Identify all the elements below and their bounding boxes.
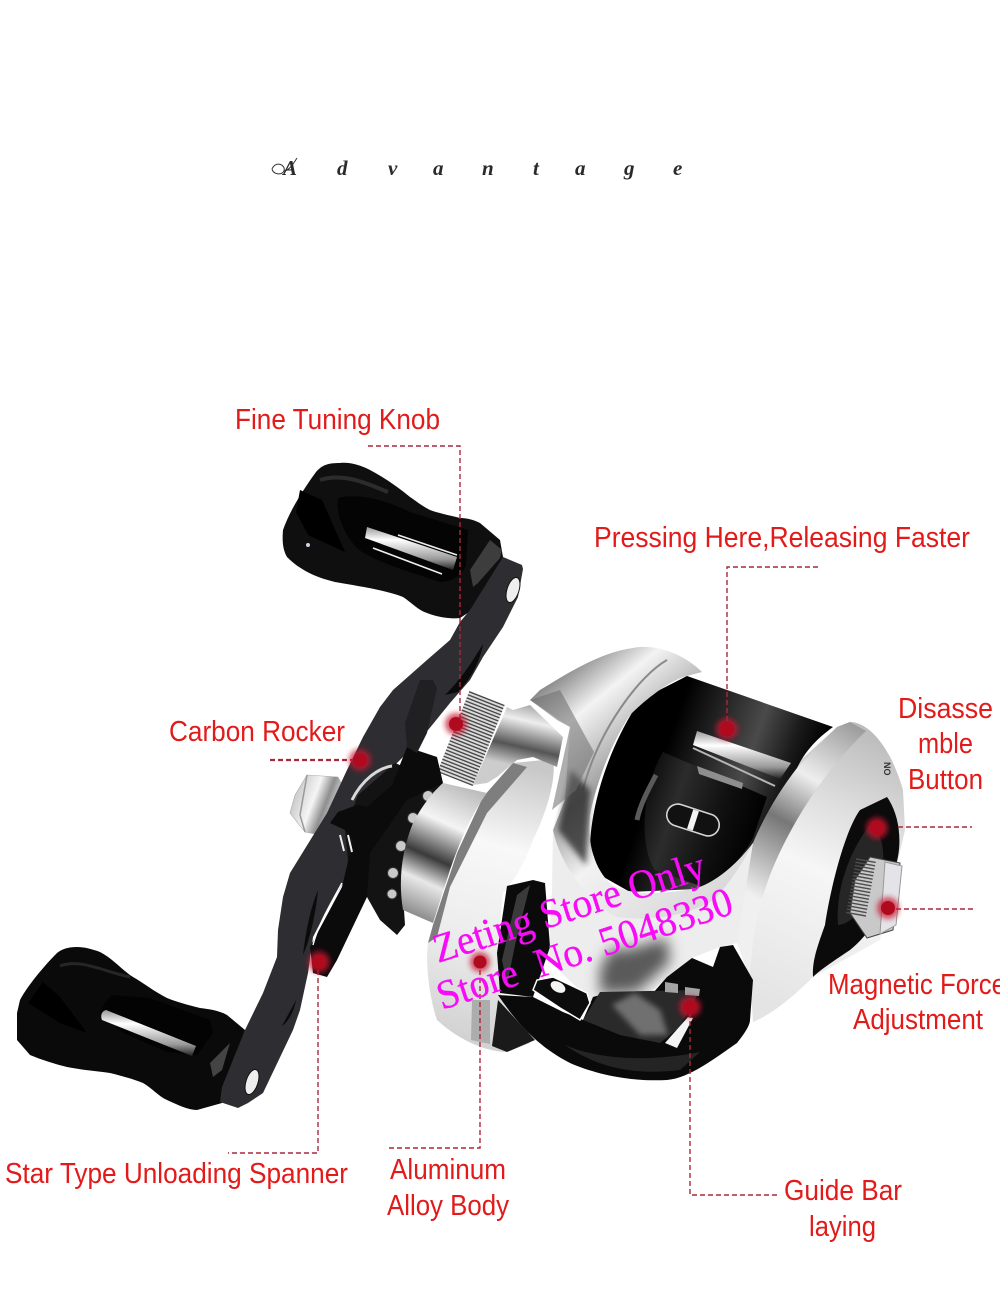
front frame arc xyxy=(530,647,753,919)
label: Magnetic Force Adjustment: Adjustment xyxy=(853,1004,983,1036)
label: Disassemble Button: Disasse xyxy=(898,693,993,725)
label: Star Type Unloading Spanner: Star Type Unloading Spanner xyxy=(5,1158,348,1190)
lower black base xyxy=(498,945,753,1080)
rear ring and magnetic dial xyxy=(813,797,902,977)
silver drum xyxy=(401,783,487,923)
leader lines xyxy=(228,446,976,1195)
label: Aluminum Alloy Body: Alloy Body xyxy=(387,1190,509,1222)
title: Advantage: Advantage xyxy=(281,156,682,180)
label: Pressing Here, Releasing Faster: Pressing Here,Releasing Faster xyxy=(594,522,970,554)
spool chamber xyxy=(590,676,833,892)
label: Disassemble Button xyxy=(898,693,993,796)
label: Disassemble Button: mble xyxy=(918,728,973,760)
central white body xyxy=(548,830,753,1000)
base window xyxy=(583,990,700,1043)
label: Guide Bar laying: laying xyxy=(809,1211,876,1243)
reel body rear section xyxy=(590,676,905,1022)
black side inset xyxy=(497,880,550,997)
hex nut xyxy=(290,775,345,835)
label: Aluminum Alloy Body: Aluminum xyxy=(390,1154,506,1186)
label: Guide Bar laying xyxy=(784,1175,902,1243)
rear frame band xyxy=(737,722,866,975)
crank arm xyxy=(220,557,523,1108)
center black lever assembly xyxy=(310,747,443,977)
illustration: baitcasting reel xyxy=(17,463,905,1110)
knurled adjustment knob xyxy=(455,698,487,779)
label: Aluminum Alloy Body xyxy=(387,1154,509,1222)
drive gear and drag disc xyxy=(345,763,443,935)
left side plate xyxy=(427,759,554,1052)
label: Carbon Rocker: Carbon Rocker xyxy=(169,716,345,748)
label: Fine Tuning Knob: Fine Tuning Knob xyxy=(235,404,440,436)
label: Disassemble Button: Button xyxy=(908,764,983,796)
silver neck xyxy=(473,705,563,785)
label: Guide Bar laying: Guide Bar xyxy=(784,1175,902,1207)
store watermark: Store No. 5048330 xyxy=(430,878,738,1019)
rear frame plate xyxy=(737,722,905,1022)
spool xyxy=(637,752,767,887)
gear port xyxy=(533,977,590,1020)
line guide bar xyxy=(693,731,791,789)
lower grip xyxy=(17,947,245,1110)
red callout dots xyxy=(308,713,899,1018)
label: Magnetic Force Adjustment xyxy=(828,969,1000,1036)
store watermark: Zeting Store Only xyxy=(427,842,711,972)
upper lever xyxy=(405,680,437,753)
brand mark: NO xyxy=(882,762,892,776)
upper grip xyxy=(283,463,503,618)
